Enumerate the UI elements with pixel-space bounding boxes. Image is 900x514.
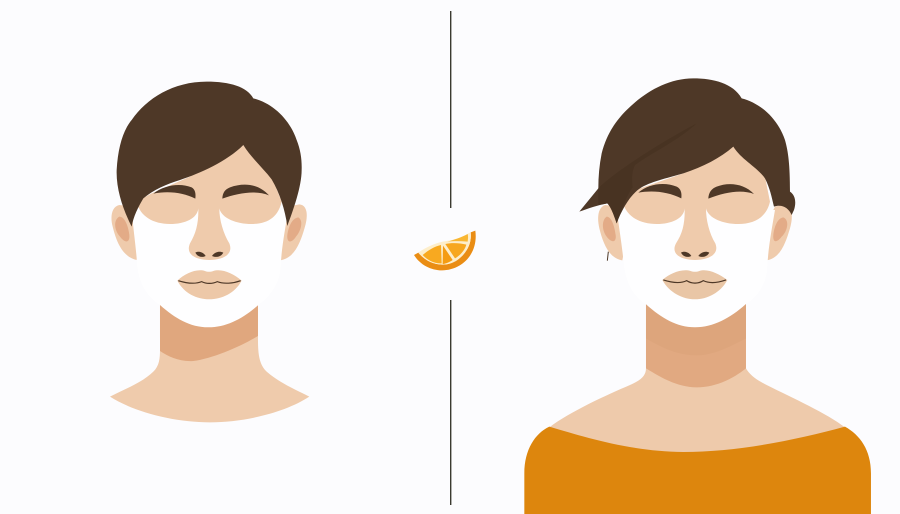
right neck shadow (646, 300, 746, 387)
divider: vertical line top (450, 11, 451, 208)
eyebrows (153, 185, 196, 199)
skin: forehead, eye patches and nose (137, 145, 282, 260)
inner ears (115, 217, 129, 241)
left ear (598, 205, 628, 260)
hair with swept fringe (579, 78, 795, 223)
right ear (763, 204, 792, 260)
right shoulders, neck and top (524, 300, 871, 514)
nostrils (681, 252, 691, 257)
eyebrows (638, 184, 682, 198)
right chest skin (549, 300, 845, 460)
lips (662, 270, 727, 299)
right ear (277, 204, 307, 260)
nostrils (195, 252, 206, 257)
white face mask (617, 210, 775, 327)
lips (177, 270, 242, 299)
left ear (111, 205, 143, 260)
lip line (663, 280, 726, 283)
panel: left figure (110, 82, 309, 422)
hair highlight stripe (598, 123, 697, 223)
panel: right figure (524, 78, 871, 514)
divider: vertical line bottom (450, 300, 451, 505)
lip line (178, 281, 241, 283)
hair (117, 82, 302, 227)
left shoulders and neck (110, 303, 309, 422)
white face mask (132, 210, 288, 327)
icon: orange slice (414, 231, 476, 270)
orange top (524, 427, 871, 514)
left neck shadow (160, 303, 258, 361)
right face (579, 78, 795, 327)
inner ears (603, 217, 616, 241)
left face (111, 82, 307, 327)
skin: forehead, eye patches and nose (623, 147, 770, 260)
stray hair strand (606, 252, 610, 261)
